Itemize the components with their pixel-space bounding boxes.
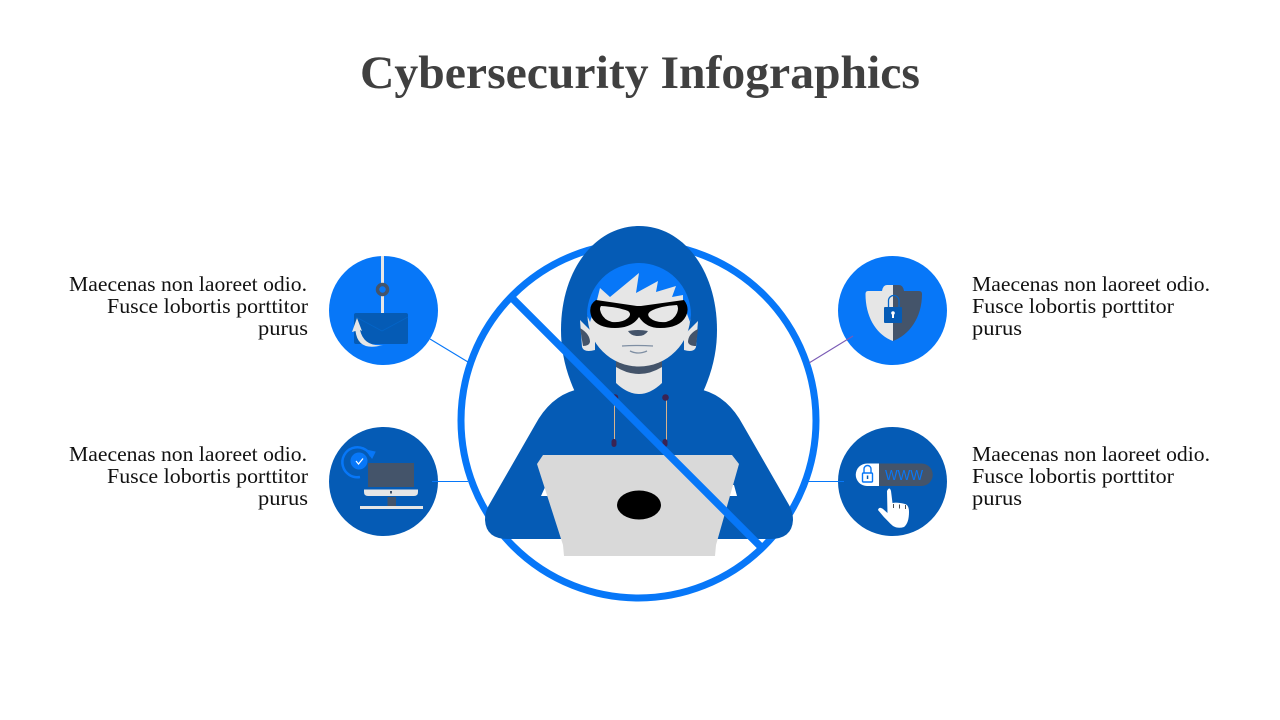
text block: bottom left xyxy=(69,442,308,510)
text block: top left: Fusce lobortis porttitor xyxy=(107,294,308,318)
title: Cybersecurity Infographics xyxy=(360,47,920,99)
mouth xyxy=(622,346,653,353)
hair xyxy=(587,263,691,322)
connector: top left xyxy=(430,339,468,362)
text block: bottom right: purus xyxy=(972,486,1022,510)
text block: top right xyxy=(972,272,1210,340)
icon: secure www pointer xyxy=(838,427,947,536)
ear right xyxy=(684,321,698,351)
text block: bottom left: Maecenas non laoreet odio. xyxy=(69,442,307,466)
text block: top right: Fusce lobortis porttitor xyxy=(972,294,1174,318)
prohibition ring xyxy=(461,243,816,598)
icon: secure www pointer: WWW xyxy=(885,467,924,484)
text block: top left: purus xyxy=(258,316,308,340)
ear left xyxy=(580,320,595,351)
icon: shield with padlock xyxy=(838,256,947,365)
text block: bottom right: Fusce lobortis porttitor xyxy=(972,464,1174,488)
text block: bottom right: Maecenas non laoreet odio. xyxy=(972,442,1210,466)
collar xyxy=(616,361,662,374)
icon: phishing hook on envelope xyxy=(329,256,438,365)
laptop logo xyxy=(617,490,661,520)
laptop keyboard tips xyxy=(541,485,737,496)
hoodie body xyxy=(485,390,793,539)
hood xyxy=(561,226,717,392)
text block: top right: purus xyxy=(972,316,1022,340)
hacker figure xyxy=(485,226,793,556)
neck xyxy=(616,360,662,394)
text block: bottom right xyxy=(972,442,1210,510)
icon: computer with check xyxy=(329,427,438,536)
text block: top left: Maecenas non laoreet odio. xyxy=(69,272,307,296)
text block: top left xyxy=(69,272,308,340)
nose xyxy=(628,330,648,336)
text block: bottom left: Fusce lobortis porttitor xyxy=(107,464,308,488)
connector: bottom right xyxy=(808,480,844,482)
hoodie strings xyxy=(612,394,669,447)
laptop xyxy=(537,455,739,556)
face xyxy=(588,264,690,366)
text block: top right: Maecenas non laoreet odio. xyxy=(972,272,1210,296)
text block: bottom left: purus xyxy=(258,486,308,510)
prohibition slash xyxy=(510,296,762,548)
connector: bottom left xyxy=(432,480,468,482)
connector: top right xyxy=(809,336,853,363)
sunglasses xyxy=(590,300,688,328)
